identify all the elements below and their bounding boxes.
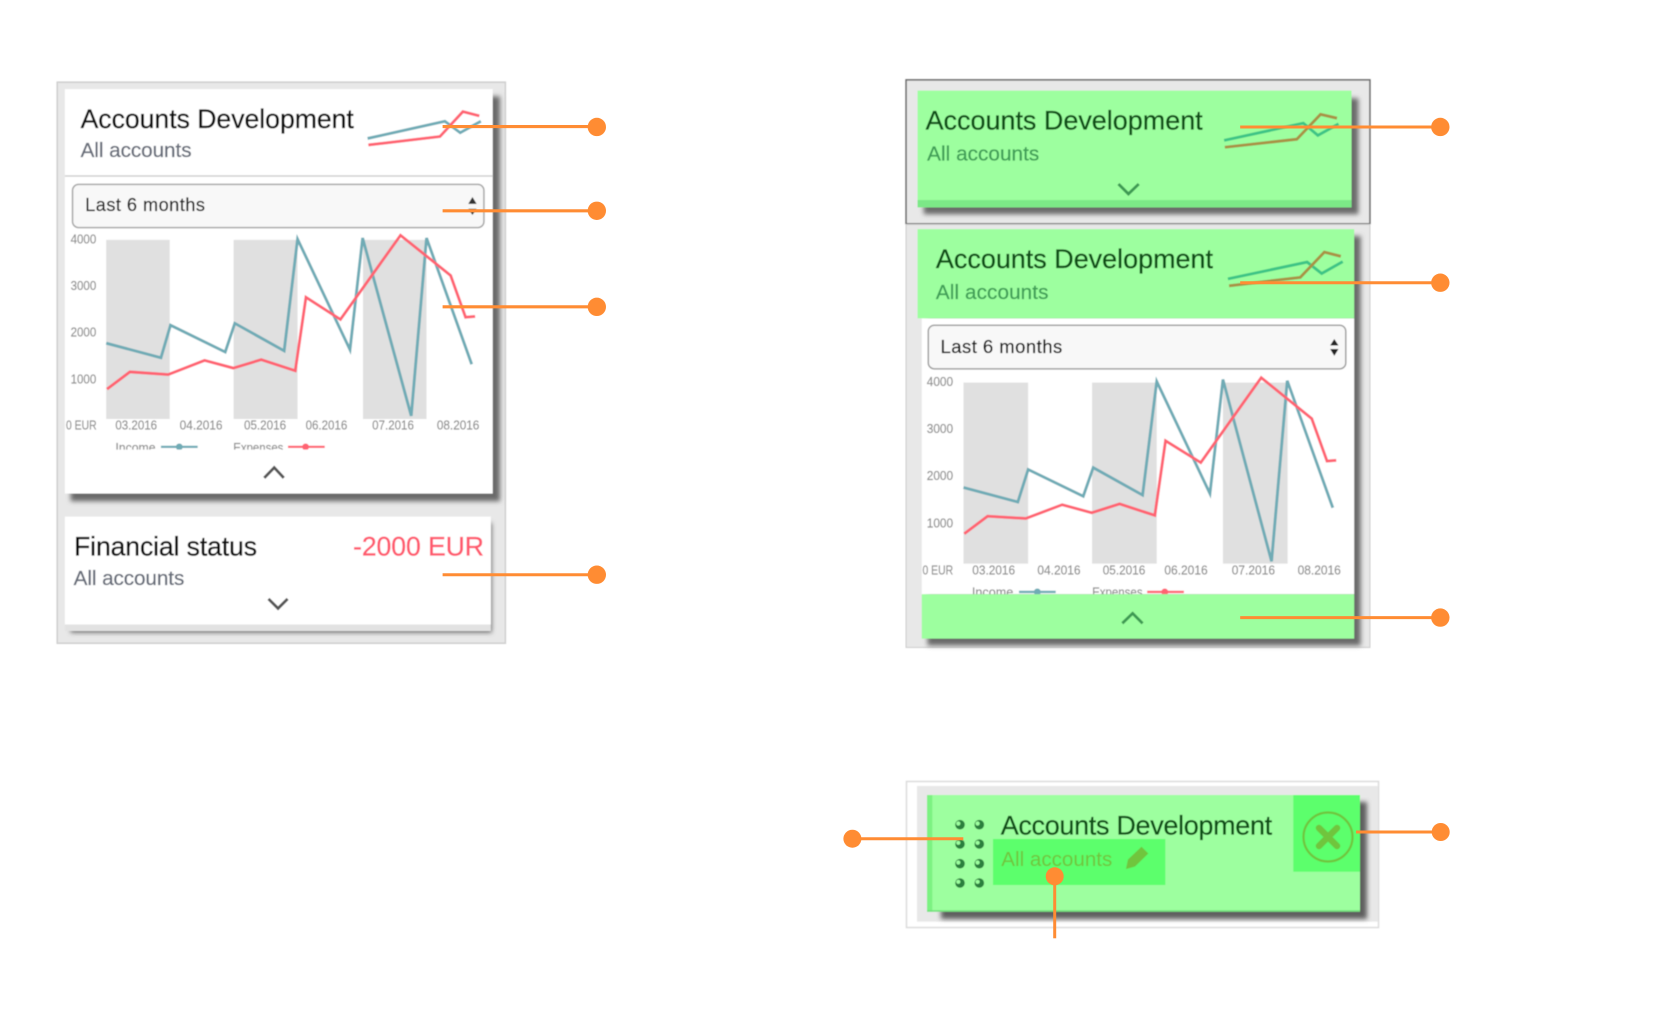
expanded tile frame [906, 225, 1370, 647]
line chart: 04.2016 [180, 419, 223, 433]
line chart: 05.2016 [1103, 564, 1145, 578]
line chart: 08.2016 [437, 419, 479, 433]
icon: expand chevron [268, 599, 288, 608]
callout: remove button [1356, 823, 1450, 841]
line chart: 07.2016 [1232, 564, 1275, 578]
icon: collapse chevron [264, 468, 284, 478]
line chart: 03.2016 [115, 419, 157, 433]
panel: default widget state [57, 82, 606, 643]
chart legend: Expenses [233, 441, 283, 455]
callout: footer [1240, 608, 1450, 627]
financial subheading: All accounts [74, 567, 184, 590]
line chart: 05.2016 [244, 419, 286, 433]
line chart: 0 EUR [66, 419, 97, 433]
green footer [922, 594, 1354, 639]
icon: collapse chevron [1122, 613, 1143, 623]
panel: edit mode state [843, 782, 1450, 938]
chart legend: Expenses [1092, 586, 1143, 600]
period select: Last 6 months [85, 195, 205, 215]
period select: Last 6 months [941, 336, 1062, 357]
line chart [923, 375, 1341, 578]
collapsed green card [918, 91, 1358, 214]
line chart: 2000 [71, 325, 96, 339]
editable subtitle highlight [993, 839, 1165, 885]
edit card [927, 795, 1367, 919]
heading: Accounts Development [1001, 810, 1273, 840]
subheading: All accounts [81, 139, 192, 162]
chart legend: Income [972, 586, 1013, 600]
callout: financial status [443, 566, 606, 584]
line chart: 03.2016 [972, 564, 1015, 578]
line chart: 4000 [927, 375, 953, 389]
chart legend: Income [115, 441, 156, 455]
line chart: 06.2016 [306, 419, 347, 433]
heading: Accounts Development [926, 106, 1203, 136]
icon: drag handle [955, 820, 984, 888]
line chart: 3000 [927, 422, 953, 436]
callout: header [443, 118, 606, 136]
heading: Accounts Development [936, 244, 1214, 274]
line chart: 1000 [71, 372, 96, 386]
subheading: All accounts [936, 281, 1048, 304]
sparkline [368, 112, 481, 145]
line chart: 06.2016 [1164, 564, 1208, 578]
callout: drag handle [843, 830, 963, 848]
line chart: 04.2016 [1037, 564, 1081, 578]
line chart: 07.2016 [372, 419, 414, 433]
expanded card [918, 229, 1361, 646]
callout: chart [443, 298, 606, 316]
line chart [66, 232, 479, 433]
frame [906, 782, 1378, 928]
icon: expand chevron [1118, 184, 1139, 194]
sparkline [1224, 114, 1339, 147]
panel: tap targets state [906, 80, 1450, 647]
frame fill [917, 786, 1378, 922]
line chart: 4000 [71, 232, 96, 246]
heading: Accounts Development [81, 104, 354, 134]
period select [73, 184, 484, 228]
subheading: All accounts [927, 143, 1039, 166]
callout: expanded header [1240, 274, 1450, 292]
sparkline [1228, 252, 1343, 286]
collapsed tile frame [906, 80, 1370, 224]
line chart: 08.2016 [1298, 564, 1341, 578]
callout: select [443, 202, 606, 220]
line chart: 1000 [927, 516, 953, 530]
period select [928, 325, 1346, 369]
icon: pencil [1126, 847, 1148, 869]
line chart: 3000 [71, 279, 96, 293]
chart legend [972, 586, 1184, 595]
line chart: 2000 [927, 469, 953, 483]
panel background [57, 82, 505, 643]
editable subtitle highlight: All accounts [1001, 848, 1112, 871]
financial amount: -2000 EUR [353, 532, 484, 562]
card: accounts development expanded [65, 89, 500, 501]
financial heading: Financial status [74, 532, 257, 562]
chart legend [116, 442, 326, 450]
remove button [1293, 795, 1360, 872]
callout: collapsed header [1240, 118, 1450, 136]
card: financial status collapsed [65, 517, 492, 633]
callout: rename subtitle [1046, 867, 1064, 938]
line chart: 0 EUR [923, 564, 953, 578]
